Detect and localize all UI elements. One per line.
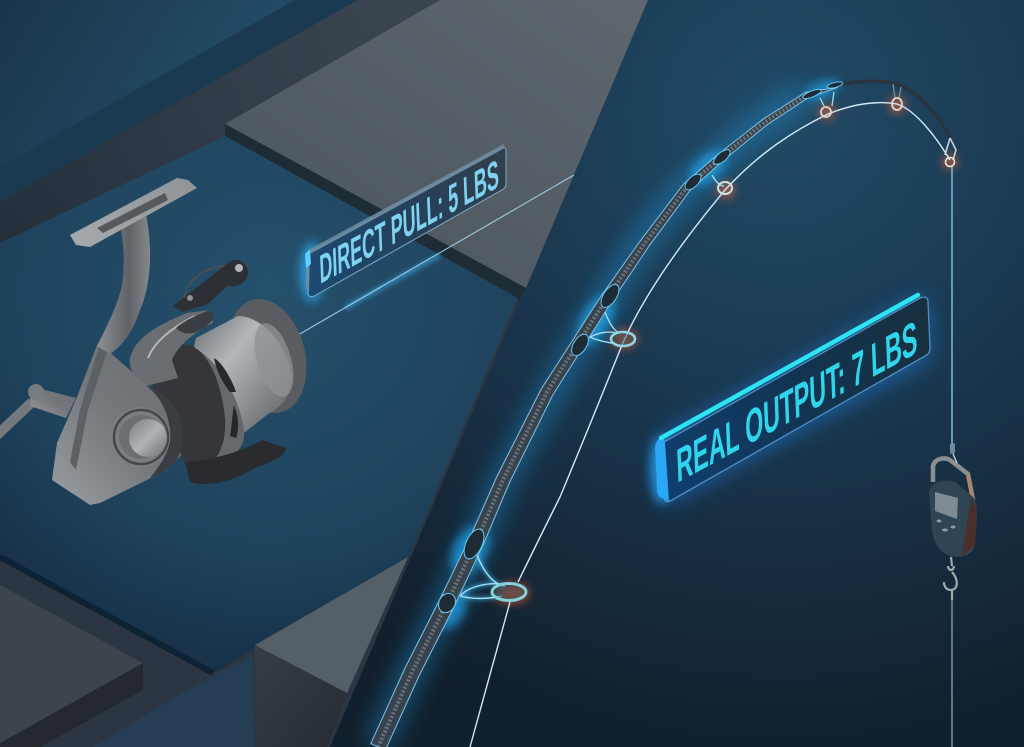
guide glows [495, 97, 957, 603]
main blue plane [0, 136, 518, 673]
spinning reel [0, 178, 318, 505]
direct pull label [300, 144, 506, 302]
scale buttons [936, 520, 956, 532]
vertical line to scale [951, 165, 953, 747]
rod tip guide [945, 138, 956, 166]
spool cylinder [193, 316, 301, 444]
rod wraps [435, 81, 843, 616]
reel top plate and stem [70, 178, 197, 354]
scale display [935, 492, 958, 519]
rotor cage with slots [176, 345, 244, 458]
lower-left grey block [0, 585, 143, 747]
digital hanging scale [929, 443, 977, 600]
rod carbon texture [378, 95, 807, 747]
carbon wrap [148, 344, 225, 471]
left geometric background [0, 0, 648, 747]
rod guide 4 [820, 92, 834, 117]
rod guide 3 [712, 175, 732, 194]
reel handle arm [0, 384, 76, 436]
lower grey block [255, 557, 408, 747]
reel body [52, 345, 183, 505]
fishing line from reel to direct pull label [298, 175, 574, 335]
real output label [650, 294, 931, 505]
grey raised platform [225, 0, 648, 300]
rod guide 5 [892, 84, 902, 110]
rod tip section [837, 81, 950, 137]
scale body [929, 480, 977, 557]
top-left blue panel [0, 0, 295, 167]
direct pull text: DIRECT PULL: 5 LBS [319, 152, 500, 293]
lower bail strap [185, 440, 286, 484]
lower blue floor [93, 655, 255, 747]
drag knob [110, 385, 183, 478]
lower rod blade [371, 88, 837, 747]
rod glow [378, 76, 842, 747]
spool flange [216, 291, 318, 421]
rod guide 1 [460, 555, 526, 600]
scale hook [944, 557, 957, 600]
upper housing and bail curve [130, 310, 214, 385]
fishing line through guides [470, 103, 950, 747]
rod guide 2 [590, 312, 635, 346]
bail arm and roller [173, 260, 248, 312]
fishing rod [371, 81, 950, 747]
scale shackle [933, 458, 973, 500]
